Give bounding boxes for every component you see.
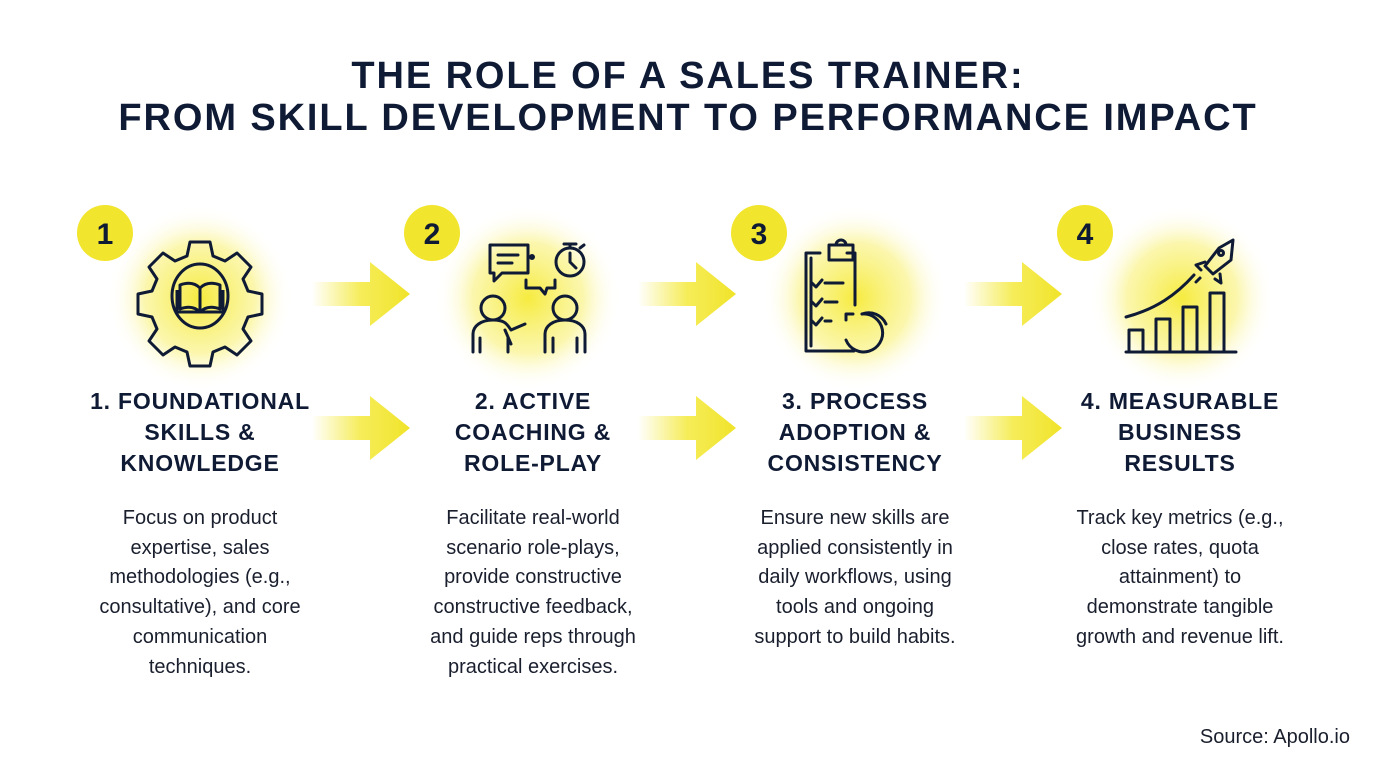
column 4 — [1076, 388, 1284, 648]
heading 1 — [90, 388, 310, 476]
body 2: provide constructive — [444, 566, 622, 588]
body 4: demonstrate tangible — [1087, 596, 1273, 618]
icon: coaching — [473, 244, 585, 352]
body 3: applied consistently in — [757, 537, 953, 559]
title: FROM SKILL DEVELOPMENT TO PERFORMANCE IMPACT — [118, 97, 1258, 139]
heading 4: BUSINESS — [1118, 419, 1242, 445]
body 1: methodologies (e.g., — [109, 566, 291, 588]
icon: gear with book — [138, 242, 262, 366]
badges: 1 — [97, 218, 113, 251]
column 2 — [430, 388, 636, 678]
body 3: Ensure new skills are — [761, 507, 949, 529]
body 3 — [754, 507, 956, 648]
body 1: Focus on product — [123, 507, 277, 529]
body 2: constructive feedback, — [434, 596, 632, 618]
heading 1: KNOWLEDGE — [120, 450, 280, 476]
body 2: Facilitate real-world — [446, 507, 620, 529]
heading 4: RESULTS — [1124, 450, 1236, 476]
body 1: techniques. — [149, 656, 251, 678]
heading 1: 1. FOUNDATIONAL — [90, 388, 310, 414]
body 1: consultative), and core — [99, 596, 301, 618]
icon: clipboard — [806, 240, 886, 352]
heading 3: ADOPTION & — [779, 419, 931, 445]
arrows — [312, 262, 1062, 460]
glows — [108, 206, 1274, 390]
body 2 — [430, 507, 636, 678]
heading 1: SKILLS & — [144, 419, 256, 445]
heading 3 — [768, 388, 942, 476]
body 4: close rates, quota — [1101, 537, 1259, 559]
title — [118, 55, 1258, 139]
body 4: growth and revenue lift. — [1076, 626, 1284, 648]
body 4: Track key metrics (e.g., — [1076, 507, 1284, 529]
body 2: practical exercises. — [448, 656, 618, 678]
heading 2: 2. ACTIVE — [475, 388, 591, 414]
heading 3: CONSISTENCY — [768, 450, 942, 476]
badges: 4 — [1077, 218, 1094, 251]
body 3: tools and ongoing — [776, 596, 934, 618]
column 1 — [90, 388, 310, 678]
source: Source: Apollo.io — [1200, 726, 1350, 748]
body 3: daily workflows, using — [758, 566, 952, 588]
icon: rocket chart — [1126, 240, 1236, 352]
heading 2: COACHING & — [455, 419, 611, 445]
body 1 — [99, 507, 301, 678]
title: THE ROLE OF A SALES TRAINER: — [351, 55, 1025, 97]
heading 2: ROLE-PLAY — [464, 450, 602, 476]
heading 4 — [1081, 388, 1279, 476]
heading 3: 3. PROCESS — [782, 388, 928, 414]
heading 4: 4. MEASURABLE — [1081, 388, 1279, 414]
body 2: scenario role-plays, — [446, 537, 620, 559]
body 1: expertise, sales — [131, 537, 269, 559]
badges: 2 — [424, 218, 440, 251]
heading 2 — [455, 388, 611, 476]
column 3 — [754, 388, 956, 648]
body 4 — [1076, 507, 1284, 648]
body 4: attainment) to — [1119, 566, 1241, 588]
badges — [77, 205, 1113, 261]
body 2: and guide reps through — [430, 626, 636, 648]
body 3: support to build habits. — [754, 626, 956, 648]
body 1: communication — [133, 626, 267, 648]
badges: 3 — [751, 218, 767, 251]
